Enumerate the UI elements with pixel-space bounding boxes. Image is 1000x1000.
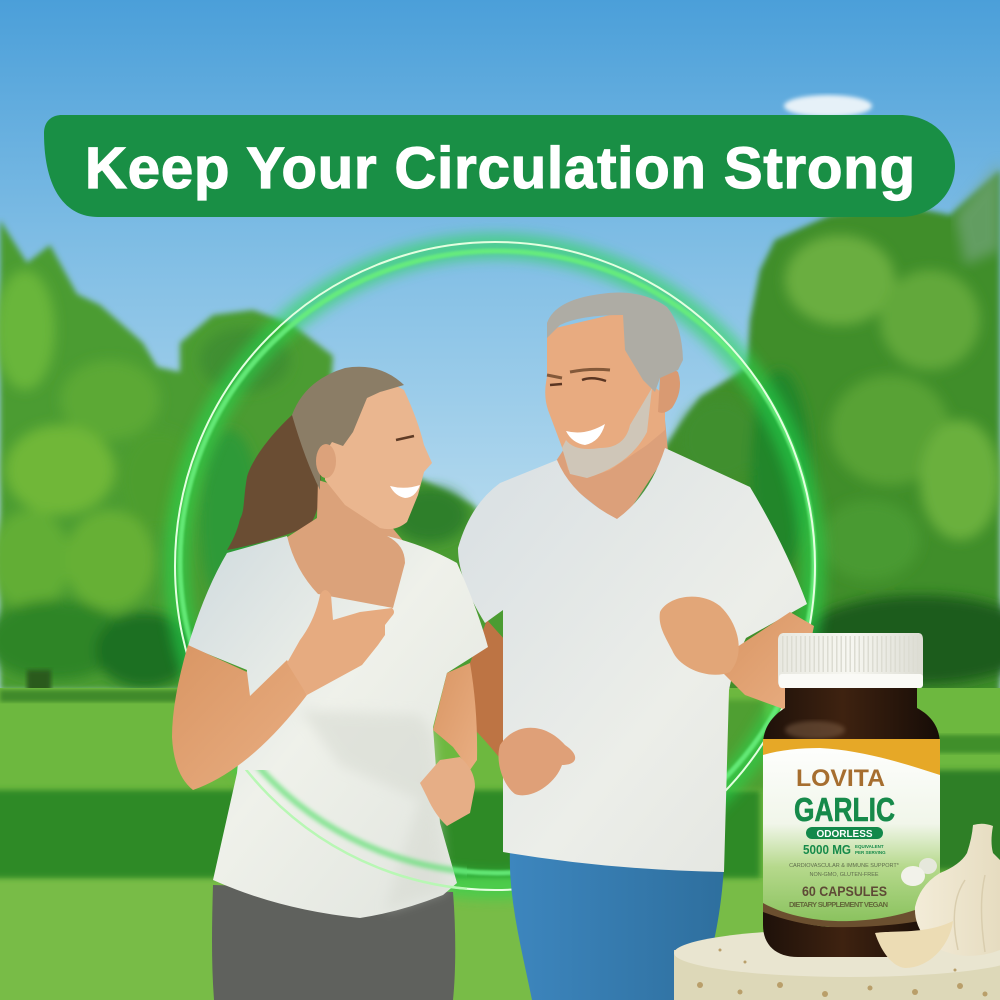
man face xyxy=(545,312,665,478)
dose: 5000 MG xyxy=(803,842,851,857)
dietary line: DIETARY SUPPLEMENT VEGAN xyxy=(789,900,888,909)
man jeans xyxy=(510,848,724,1000)
woman smile xyxy=(390,485,420,498)
man xyxy=(458,293,814,1000)
background: trees left xyxy=(0,220,520,700)
man fist xyxy=(660,597,739,675)
woman ear xyxy=(316,444,336,478)
glowing circle overlap on shirt xyxy=(245,770,467,890)
dose xyxy=(803,842,886,857)
woman shirt xyxy=(188,536,488,918)
claims xyxy=(789,863,900,878)
garlic bulb xyxy=(915,824,1000,956)
tree trunk xyxy=(27,670,51,700)
odorless pill: ODORLESS xyxy=(816,829,873,840)
background: sky xyxy=(0,0,1000,520)
woman neck xyxy=(275,480,415,615)
woman eye xyxy=(396,436,414,440)
woman xyxy=(172,367,488,1000)
woman fist xyxy=(420,757,475,826)
man shirt xyxy=(458,448,807,872)
woman hair xyxy=(292,367,404,490)
cloud xyxy=(784,95,872,117)
man smile xyxy=(566,424,605,445)
title banner xyxy=(44,115,955,217)
label garlic icon xyxy=(901,858,937,886)
man arm behind xyxy=(470,620,530,762)
title: Keep Your Circulation Strong xyxy=(85,136,915,201)
man hand xyxy=(498,728,575,795)
man neck xyxy=(550,420,668,525)
woman ponytail xyxy=(227,415,321,550)
man eyes xyxy=(550,378,606,385)
capsule count: 60 CAPSULES xyxy=(802,883,887,899)
man ear xyxy=(658,370,680,413)
woman hand on chest xyxy=(287,590,394,695)
man brow xyxy=(547,369,610,378)
label brown band xyxy=(763,900,940,927)
label xyxy=(763,739,940,927)
woman left arm xyxy=(172,645,307,790)
man beard xyxy=(562,388,652,478)
bottle highlight xyxy=(785,721,845,739)
background: trees right xyxy=(600,160,1000,695)
label gold band xyxy=(763,739,940,775)
speckles xyxy=(697,948,988,997)
odorless pill xyxy=(806,827,883,840)
claims: CARDIOVASCULAR & IMMUNE SUPPORT* xyxy=(789,863,900,869)
glowing circle xyxy=(175,242,815,890)
man forearm right xyxy=(722,612,814,710)
garlic heading: GARLIC xyxy=(794,791,895,828)
dose: EQUIVALENT xyxy=(855,844,884,849)
pedestal xyxy=(674,929,1000,1000)
bottle glass xyxy=(763,688,940,957)
bottle cap xyxy=(778,633,923,688)
garlic clove xyxy=(875,921,953,968)
man hair xyxy=(547,293,683,392)
dose: PER SERVING xyxy=(855,850,886,855)
woman right arm xyxy=(433,663,477,770)
woman pants xyxy=(212,885,455,1000)
background: grass lawn xyxy=(0,688,1000,1000)
product bottle xyxy=(763,633,940,957)
claims: NON-GMO, GLUTEN-FREE xyxy=(809,872,879,878)
woman face xyxy=(325,380,432,529)
brand: LOVITA xyxy=(796,765,885,792)
woman shirt shadows xyxy=(300,710,445,910)
